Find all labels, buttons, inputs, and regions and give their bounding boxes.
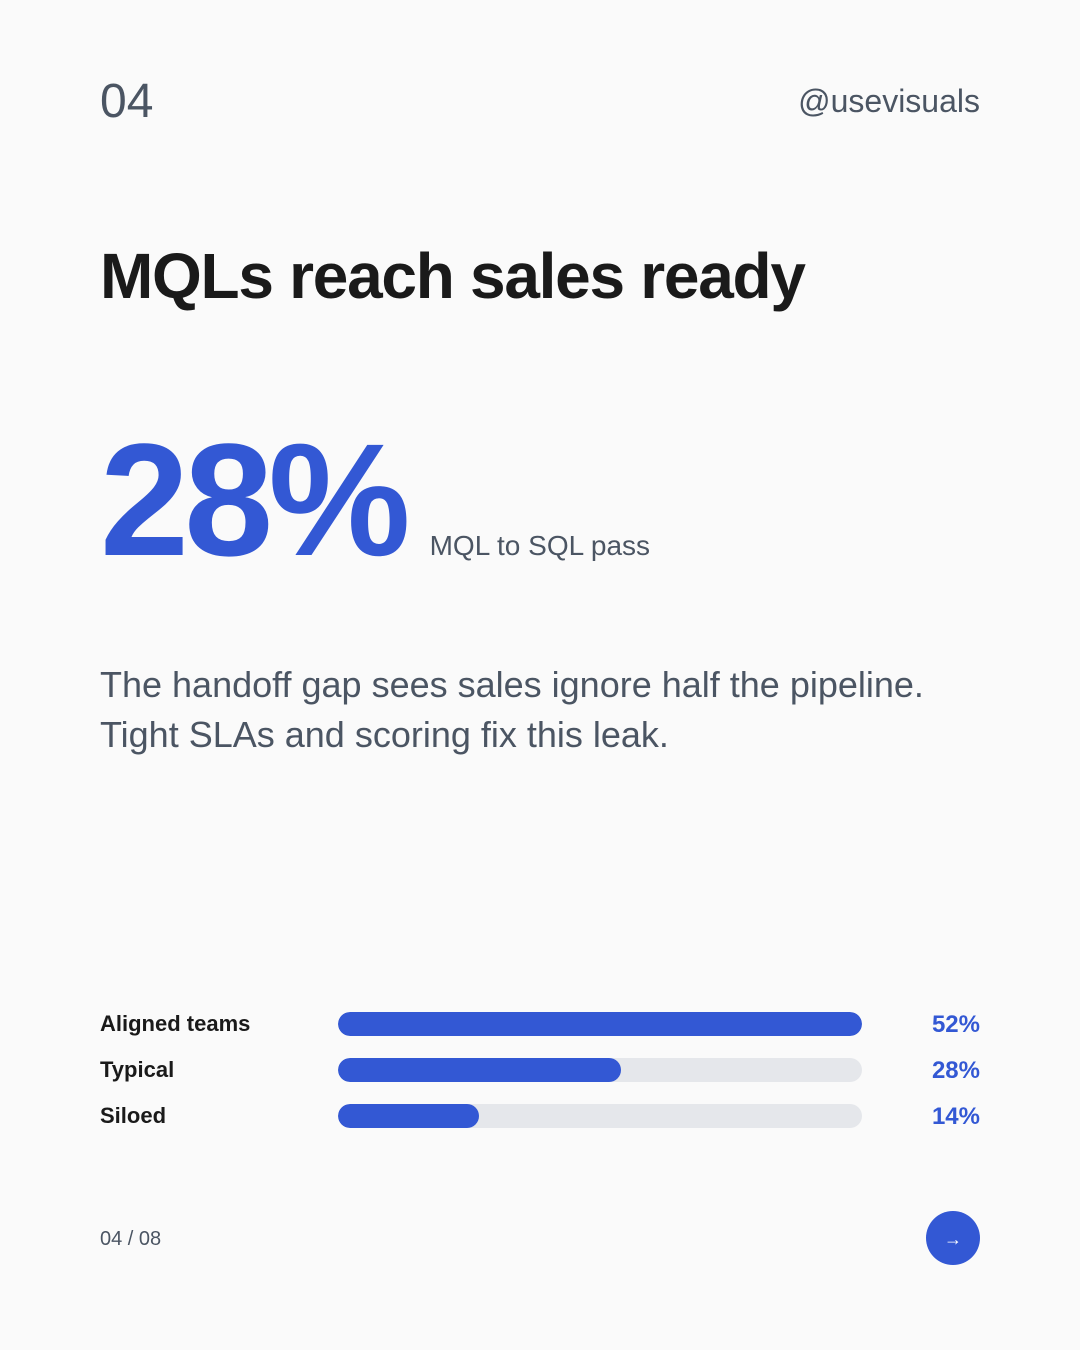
row: typical label: Typical [100, 1057, 174, 1082]
description: Tight SLAs and scoring fix this leak. [100, 714, 669, 755]
description [100, 664, 924, 755]
row: siloed bar [338, 1104, 862, 1128]
page number: 04 [100, 75, 153, 128]
bar chart [100, 1011, 980, 1130]
handle: @usevisuals [798, 83, 980, 119]
pagination: 04 / 08 [100, 1228, 161, 1250]
big stat: 28% [100, 410, 406, 589]
title: MQLs reach sales ready [100, 240, 805, 312]
stat label: MQL to SQL pass [430, 530, 650, 561]
description: The handoff gap sees sales ignore half the pipeline. [100, 664, 924, 705]
row: siloed value: 14% [932, 1103, 980, 1130]
row: aligned teams bar [338, 1012, 862, 1036]
row: typical bar [338, 1058, 862, 1082]
row: aligned teams value: 52% [932, 1011, 980, 1038]
row: typical value: 28% [932, 1057, 980, 1084]
icon: next arrow button: → [944, 1229, 962, 1249]
icon: next arrow button [926, 1211, 980, 1265]
row: siloed label: Siloed [100, 1103, 166, 1128]
row: aligned teams label: Aligned teams [100, 1011, 250, 1036]
